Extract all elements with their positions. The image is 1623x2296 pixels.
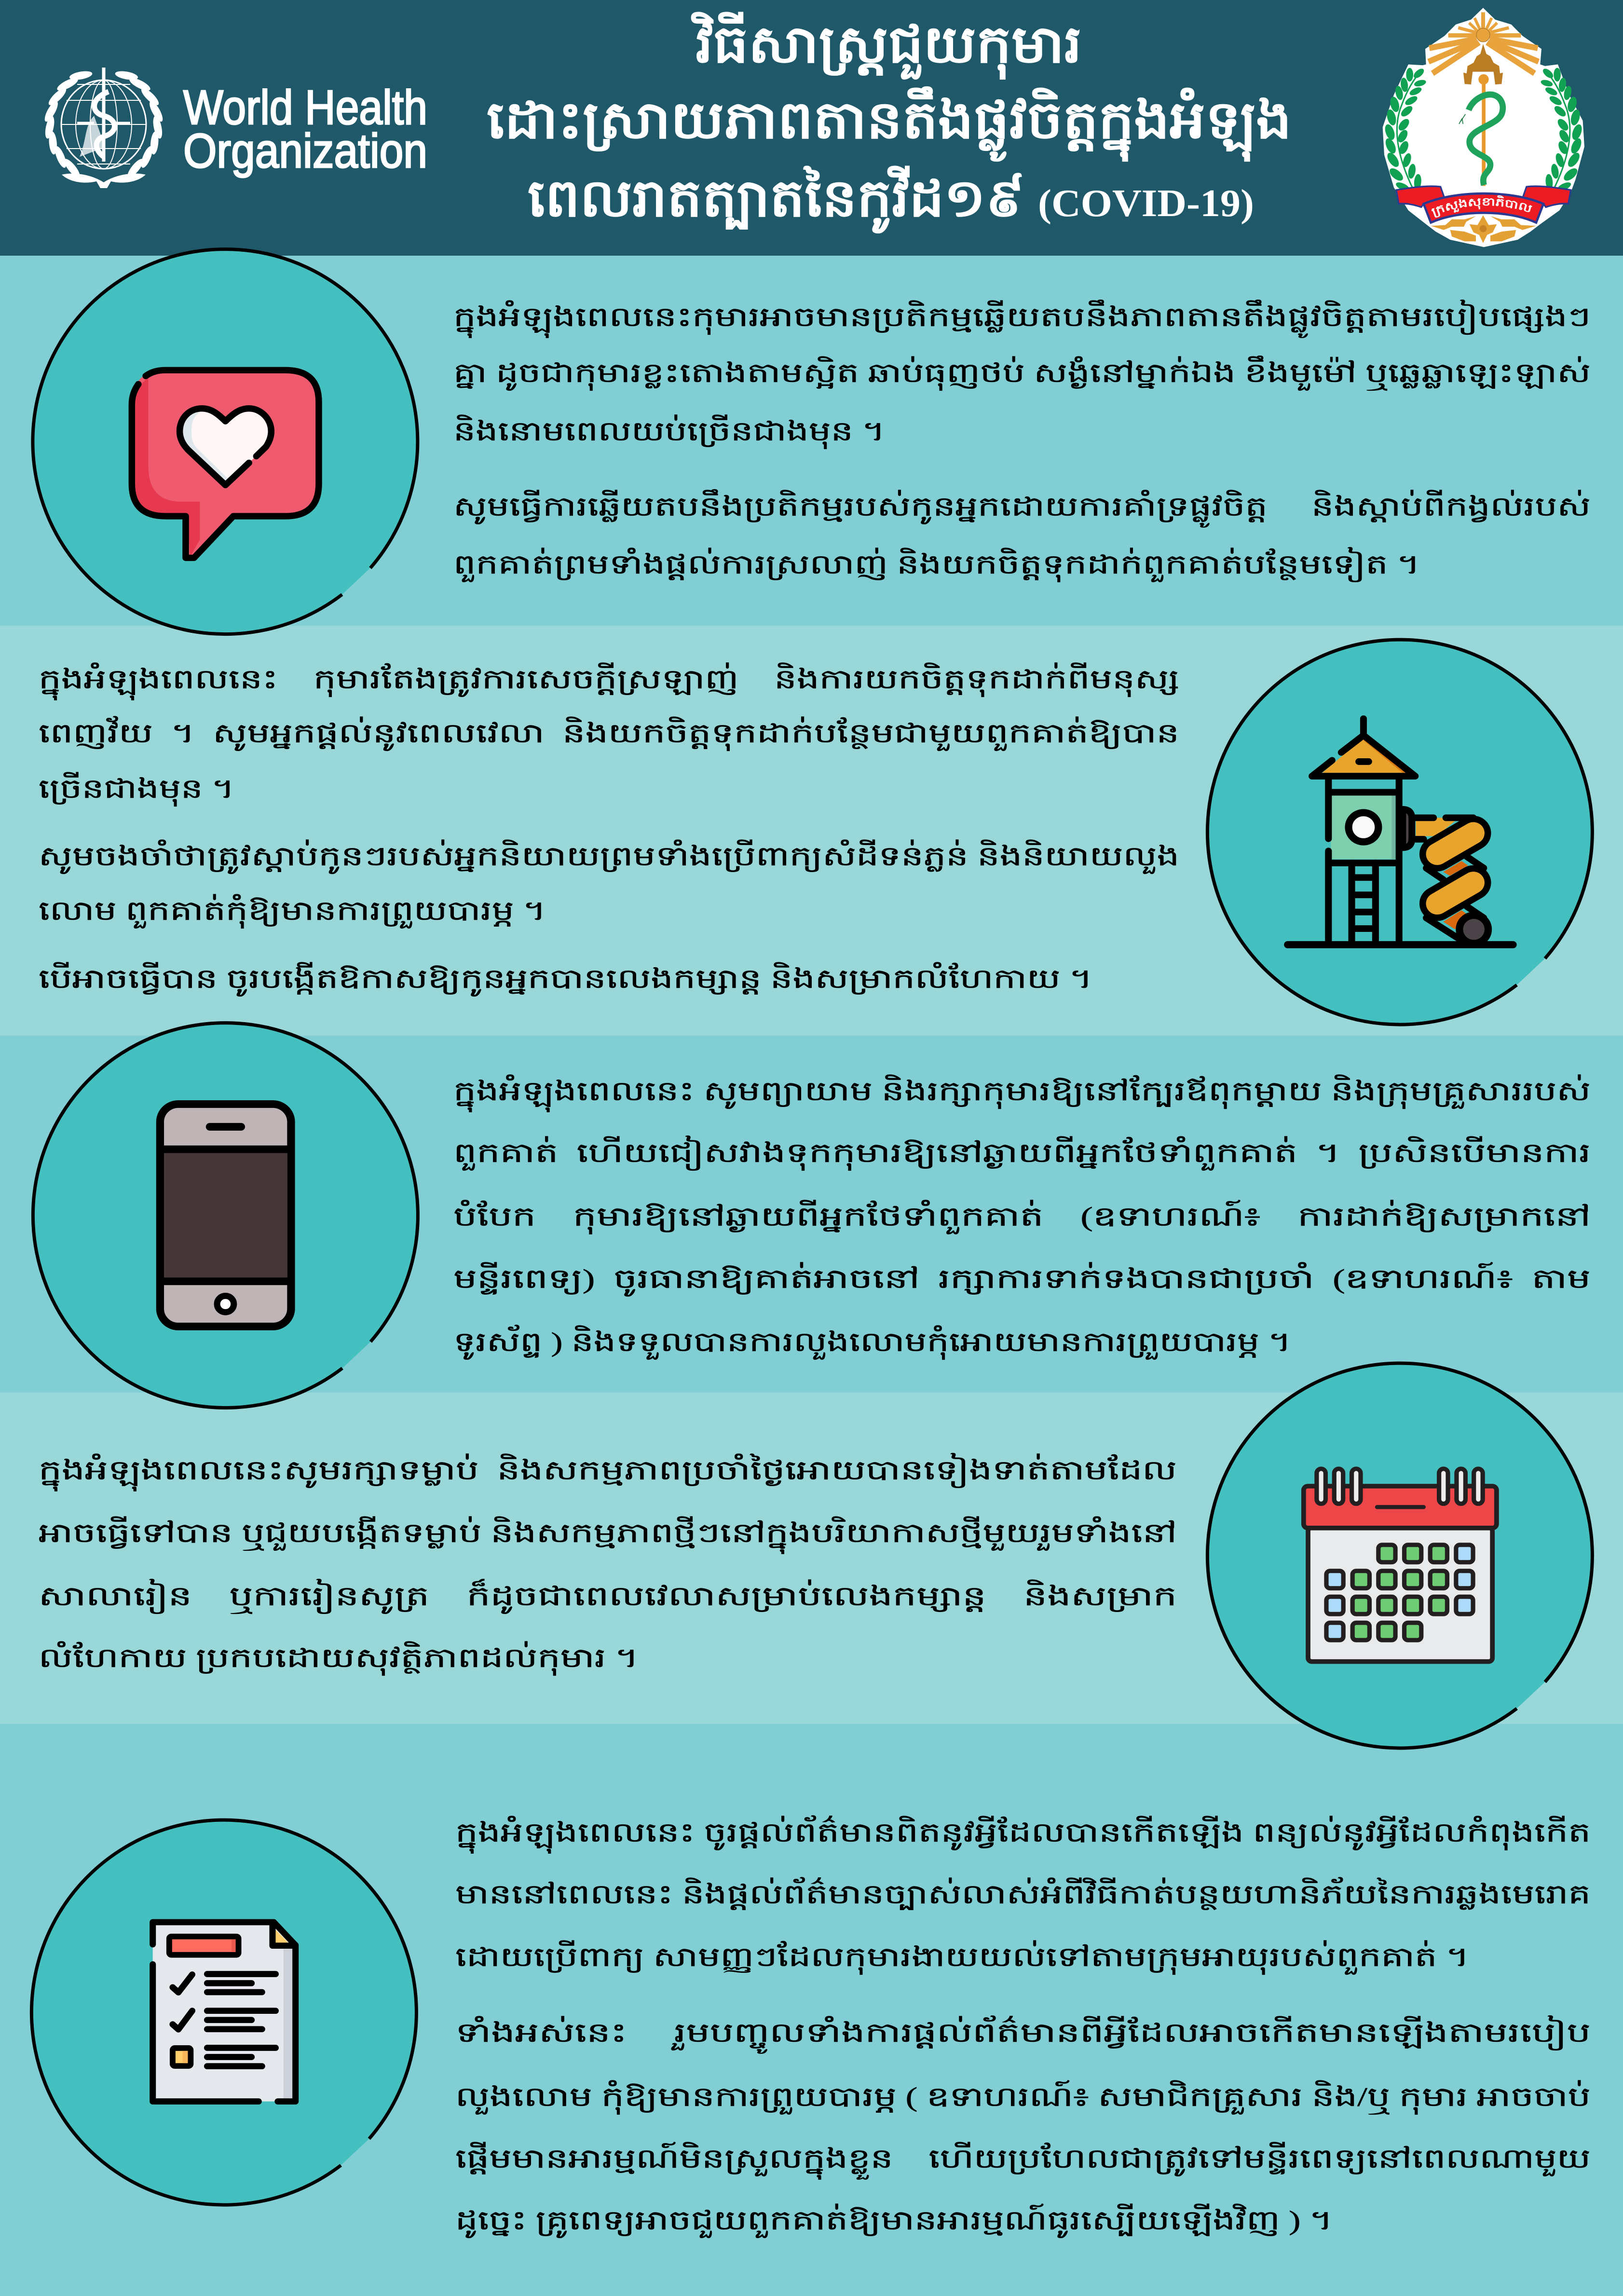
text block: section 4: លំហែកាយ ប្រកបដោយសុវត្ថិភាពដល់កុមារ ។	[39, 1641, 639, 1676]
panel: section 4	[39, 1363, 1592, 1748]
text block: section 1: សូមធ្វើការឆ្លើយតបនឹងប្រតិកម្មរបស់កូនអ្នកដោយការគាំទ្រផ្លូវចិត្ត និងស្តាប់ពីកង្វល់របស់	[453, 489, 1591, 528]
icon: WHO emblem	[42, 68, 165, 188]
logo wordmark: Organization	[183, 124, 427, 178]
ornament	[1431, 215, 1536, 243]
laurel left	[1383, 67, 1427, 193]
panel: section 3	[33, 1023, 1591, 1408]
icon: checklist document	[31, 1820, 416, 2205]
header	[42, 8, 1584, 247]
text block: section 2: បើអាចធ្វើបាន ចូរបង្កើតឱកាសឱ្យកូនអ្នកបានលេងកម្សាន្ត និងសម្រាកលំហែកាយ ។	[39, 962, 1092, 997]
logo: World Health Organization	[42, 68, 427, 188]
logo: Ministry of Health emblem: ក្រសួងសុខាភិបាល	[1430, 194, 1534, 219]
text block: section 5: មាននៅពេលនេះ និងផ្តល់ព័ត៌មានច្បាស់លាស់អំពីវិធីកាត់បន្ថយហានិភ័យនៃការឆ្លងមេរោគ	[455, 1877, 1591, 1910]
text block: section 3: ពួកគាត់ ហើយជៀសវាងទុកកុមារឱ្យនៅឆ្ងាយពីអ្នកថែទាំពួកគាត់ ។ ប្រសិនបើមានការ	[453, 1135, 1591, 1171]
text block: section 4: អាចធ្វើទៅបាន ឬជួយបង្កើតទម្លាប់ និងសកម្មភាពថ្មីៗនៅក្នុងបរិយាកាសថ្មីមួយរួមទាំងនៅ	[39, 1516, 1177, 1554]
text block: section 1: ក្នុងអំឡុងពេលនេះកុមារអាចមានប្រតិកម្មឆ្លើយតបនឹងភាពតានតឹងផ្លូវចិត្តតាមរបៀបផ្សេងៗ	[453, 300, 1591, 338]
text block: section 3: បំបែក កុមារឱ្យនៅឆ្ងាយពីអ្នកថែទាំពួកគាត់ (ឧទាហរណ៍៖ ការដាក់ឱ្យសម្រាកនៅ	[453, 1200, 1591, 1234]
title: ដោះស្រាយភាពតានតឹងផ្លូវចិត្តក្នុងអំឡុង	[487, 86, 1292, 162]
text block: section 3: ក្នុងអំឡុងពេលនេះ សូមព្យាយាម និងរក្សាកុមារឱ្យនៅក្បែរឪពុកម្តាយ និងក្រុមគ្រួសាររបស់	[453, 1074, 1591, 1112]
ribbon	[1396, 186, 1445, 207]
text block: section 5: ដោយប្រើពាក្យ សាមញ្ញៗដែលកុមារងាយយល់ទៅតាមក្រុមអាយុរបស់ពួកគាត់ ។	[455, 1940, 1469, 1975]
text block: section 2: សូមចងចាំថាត្រូវស្តាប់កូនៗរបស់អ្នកនិយាយព្រមទាំងប្រើពាក្យសំដីទន់ភ្លន់ និងនិយាយលួង	[39, 839, 1179, 874]
text block: section 4: សាលារៀន ឬការរៀនសូត្រ ក៏ដូចជាពេលវេលាសម្រាប់លេងកម្សាន្ត និងសម្រាក	[39, 1579, 1177, 1614]
panel: section 2	[39, 640, 1592, 1025]
text block: section 2: ពេញវ័យ ។ សូមអ្នកផ្តល់នូវពេលវេលា និងយកចិត្តទុកដាក់បន្ថែមជាមួយពួកគាត់ឱ្យបាន	[39, 716, 1179, 751]
staff	[1482, 80, 1486, 186]
text block: section 1	[453, 300, 1591, 582]
text block: section 2	[39, 662, 1179, 997]
text block: section 2: លោម ពួកគាត់កុំឱ្យមានការព្រួយបារម្ភ ។	[39, 894, 546, 929]
text block: section 5: ដូច្នេះ គ្រូពេទ្យអាចជួយពួកគាត់ឱ្យមានអារម្មណ៍ធូរស្បើយឡើងវិញ ) ។	[455, 2203, 1333, 2238]
icon: calendar	[1207, 1363, 1592, 1748]
snake	[1469, 95, 1503, 185]
text block: section 3: ទូរស័ព្ទ ) និងទទួលបានការលួងលោមកុំអោយមានការព្រួយបារម្ភ ។	[453, 1325, 1291, 1360]
text block: section 2: ច្រើនជាងមុន ។	[39, 772, 234, 806]
icon: playground slide	[1207, 640, 1592, 1025]
text block: section 2: ក្នុងអំឡុងពេលនេះ កុមារតែងត្រូវការសេចក្តីស្រឡាញ់ និងការយកចិត្តទុកដាក់ពីមនុស្ស	[39, 662, 1179, 700]
text block: section 3	[453, 1074, 1591, 1360]
logo wordmark: World Health	[183, 81, 427, 135]
logo wordmark	[183, 81, 427, 178]
icon: mobile phone	[33, 1023, 418, 1408]
text block: section 4: ក្នុងអំឡុងពេលនេះសូមរក្សាទម្លាប់ និងសកម្មភាពប្រចាំថ្ងៃអោយបានទៀងទាត់តាមដែល	[39, 1453, 1177, 1491]
text block: section 1: គ្នា ដូចជាកុមារខ្លះតោងតាមស្អិត ឆាប់ធុញថប់ សង្ងំនៅម្នាក់ឯង ខឹងមួម៉ៅ ឬឆ្លេឆ្លាឡេះឡាស់	[453, 355, 1591, 391]
text block: section 4	[39, 1453, 1177, 1676]
title	[487, 12, 1292, 233]
text block: section 5: ក្នុងអំឡុងពេលនេះ ចូរផ្តល់ព័ត៌មានពិតនូវអ្វីដែលបានកើតឡើង ពន្យល់នូវអ្វីដែលកំពុងកើត	[455, 1815, 1591, 1854]
text block: section 5	[455, 1815, 1591, 2238]
title: ពេលរាតត្បាតនៃកូវីដ១៩	[528, 165, 1024, 233]
text block: section 1: និងនោមពេលយប់ច្រើនជាងមុន ។	[453, 414, 885, 449]
laurel right	[1540, 67, 1583, 193]
text block: section 5: លួងលោម កុំឱ្យមានការព្រួយបារម្ភ ( ឧទាហរណ៍៖ សមាជិកគ្រួសារ និង/ឬ កុមារ អាចចាប់	[455, 2080, 1591, 2115]
text block: section 5: ទាំងអស់នេះ រួមបញ្ចូលទាំងការផ្តល់ព័ត៌មានពីអ្វីដែលអាចកើតមានឡើងតាមរបៀប	[455, 2015, 1591, 2054]
rays	[1429, 12, 1539, 73]
crown	[1463, 44, 1503, 84]
title: (COVID-19)	[1038, 182, 1254, 225]
panel: section 5	[31, 1815, 1591, 2238]
icon: speech bubble with heart	[33, 249, 418, 634]
text block: section 3: មន្ទីរពេទ្យ) ចូរធានាឱ្យគាត់អាចនៅ រក្សាការទាក់ទងបានជាប្រចាំ (ឧទាហរណ៍៖ តាម	[453, 1262, 1591, 1297]
text block: section 1: ពួកគាត់ព្រមទាំងផ្តល់ការស្រលាញ់ និងយកចិត្តទុកដាក់ពួកគាត់បន្ថែមទៀត ។	[453, 547, 1420, 582]
title: វិធីសាស្ត្រជួយកុមារ	[691, 12, 1082, 80]
text block: section 5: ផ្តើមមានអារម្មណ៍មិនស្រួលក្នុងខ្លួន ហើយប្រហែលជាត្រូវទៅមន្ទីរពេទ្យនៅពេលណាមួយ	[455, 2142, 1591, 2180]
logo: Ministry of Health emblem	[1383, 8, 1584, 247]
panel: section 1	[33, 249, 1591, 634]
